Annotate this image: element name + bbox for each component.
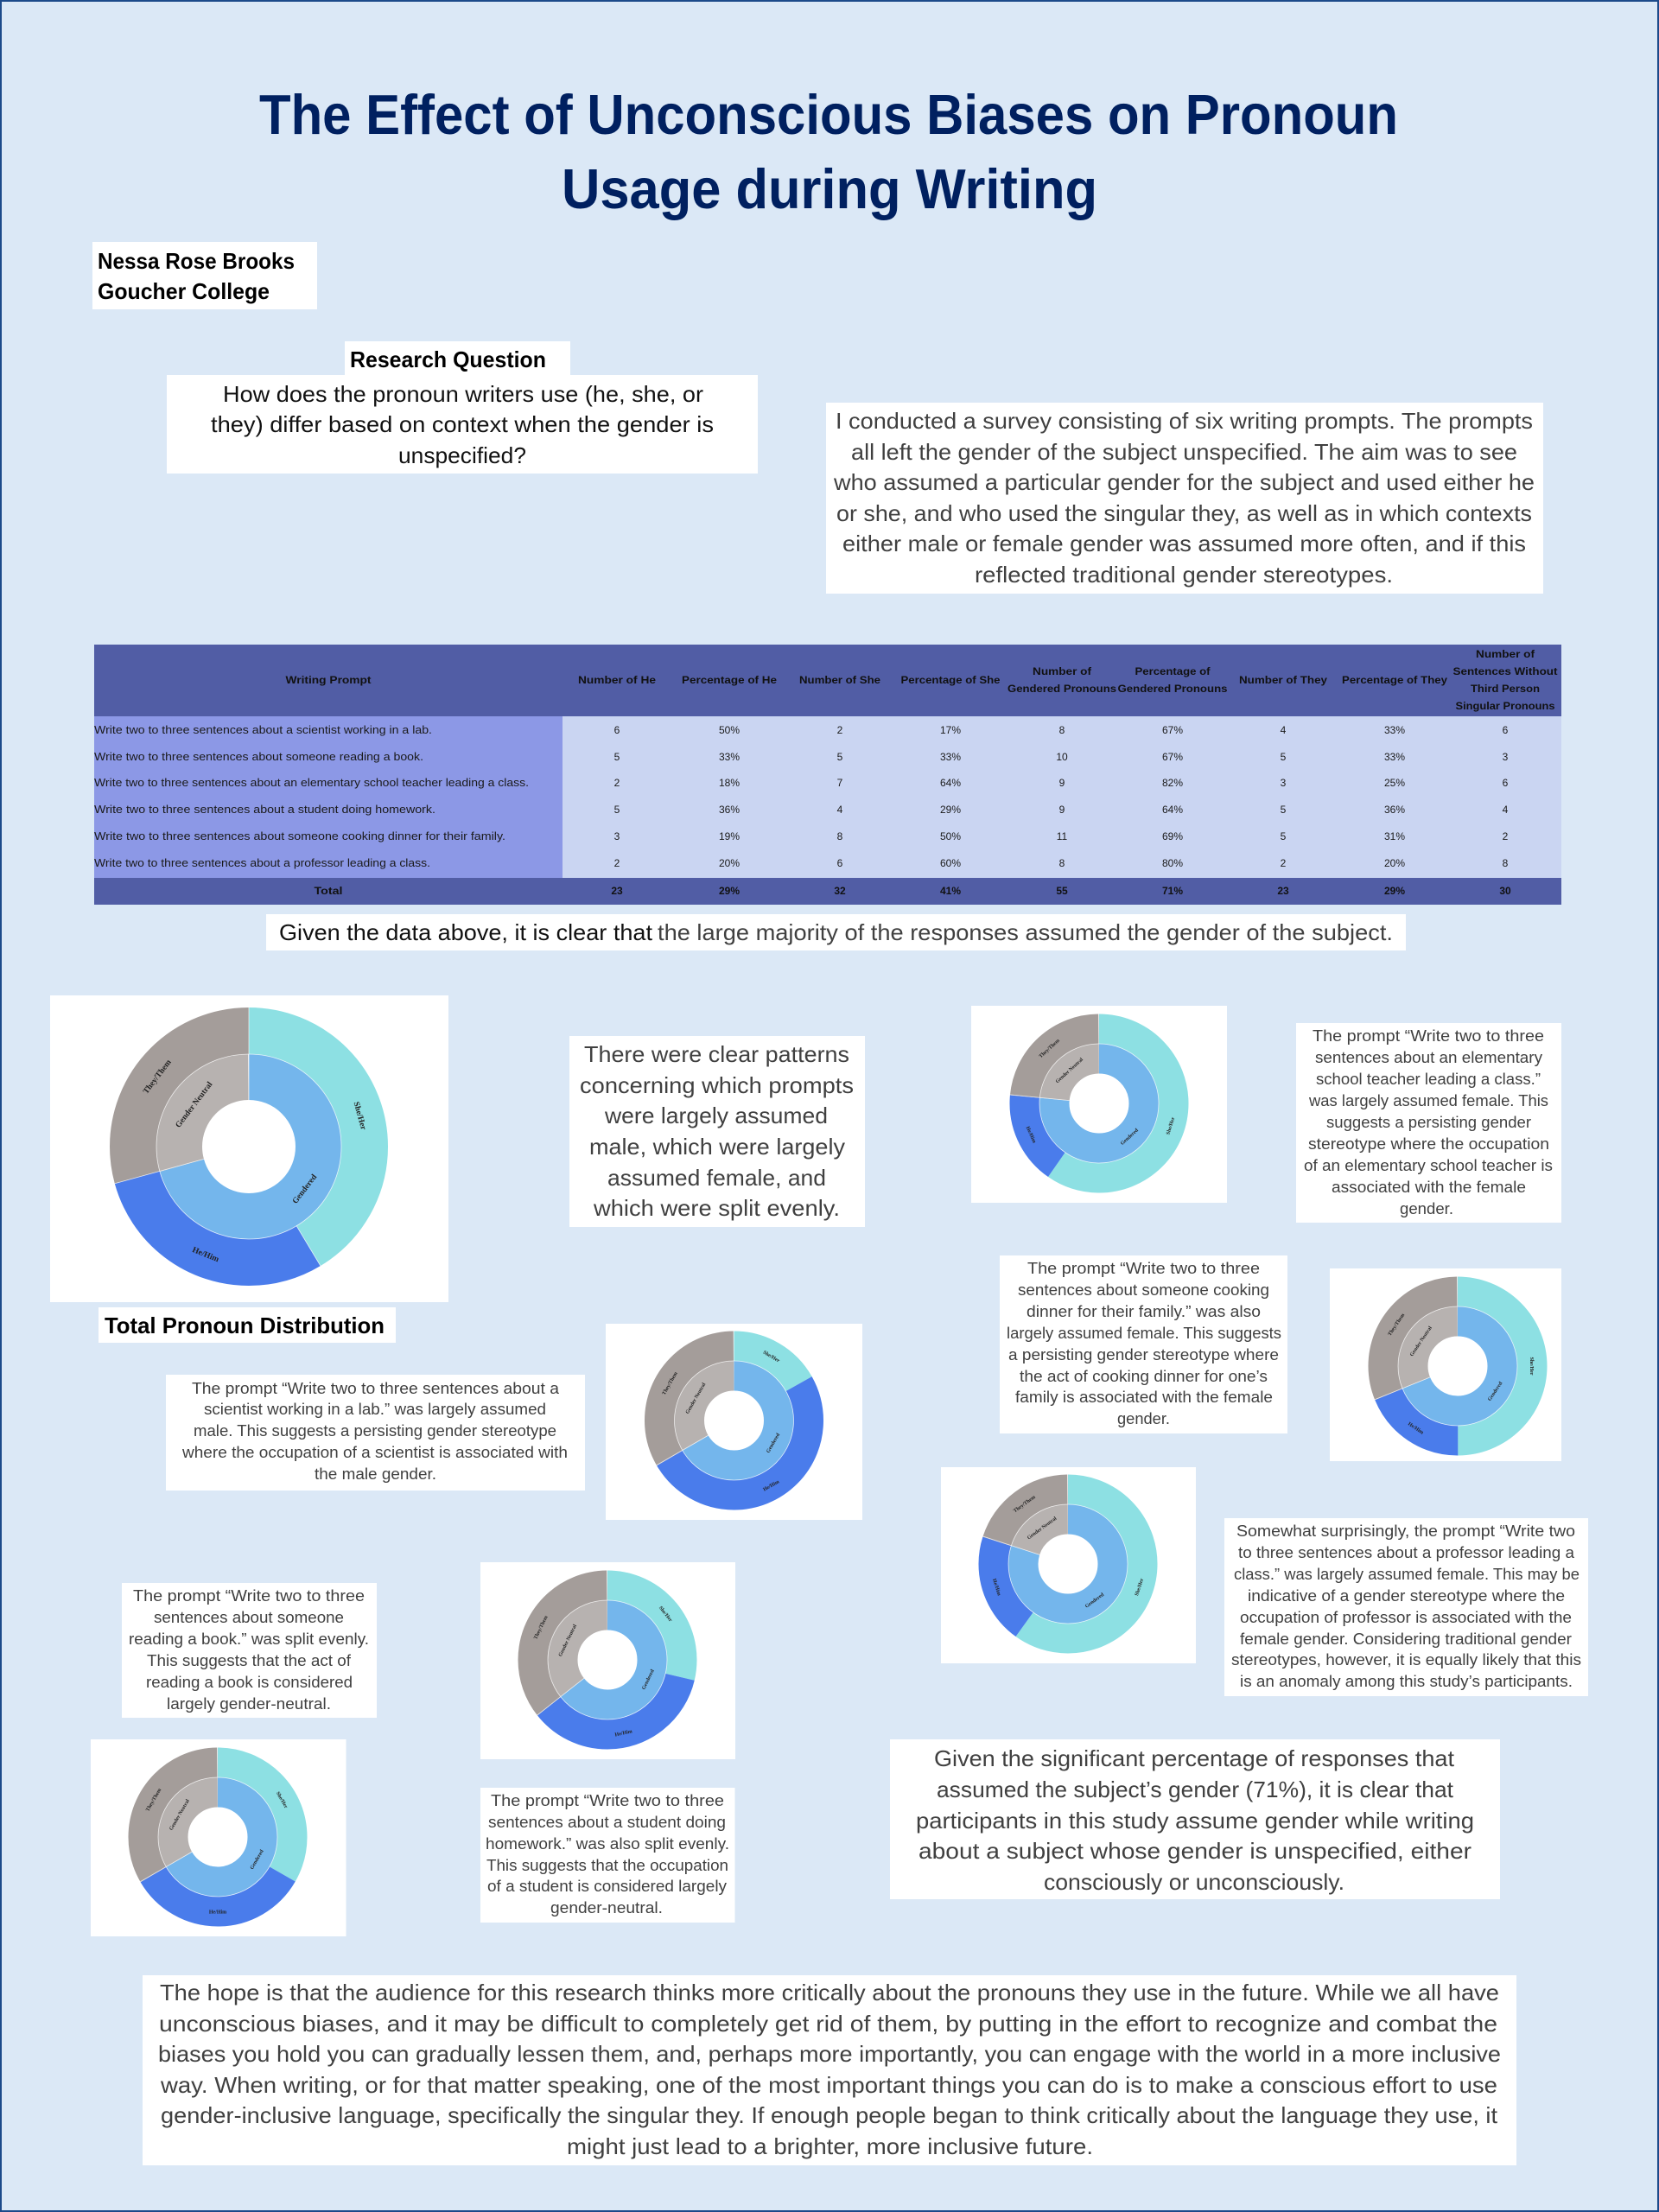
- table row: scientist: Write two to three sentences about a scientist working in a lab.: [94, 724, 432, 736]
- table row: professor: 2: [1281, 857, 1287, 869]
- text block: professor: indicative of a gender stereotype where the: [1248, 1587, 1565, 1605]
- text block: final hope statement: biases you hold you can gradually lessen them, and, perhaps more importantly, you can engage with the world in a more inclusive: [158, 2041, 1501, 2067]
- table header: Gendered Pronouns: [1007, 683, 1116, 695]
- text block: reading: The prompt “Write two to three: [133, 1587, 365, 1605]
- chart: professor: They/Them: [1013, 1495, 1037, 1514]
- text block: final hope statement: gender-inclusive language, specifically the singular they. If enough people began to think critically about the language they use, it: [161, 2102, 1498, 2128]
- chart: reading a book: Gender Neutral: [558, 1624, 578, 1657]
- chart: elementary school teacher: Gender Neutral: [1055, 1057, 1084, 1084]
- chart: cooking dinner: He/Him: [1407, 1421, 1424, 1436]
- table header: Percentage of: [1135, 665, 1211, 677]
- text block: patterns: concerning which prompts: [580, 1072, 854, 1098]
- table row: scientist: 6: [1503, 724, 1509, 736]
- table header: Writing Prompt: [285, 674, 372, 686]
- table row: student: 9: [1059, 804, 1065, 816]
- author block: Goucher College: [98, 278, 270, 304]
- text block: student homework: of a student is considered largely: [487, 1878, 727, 1895]
- table row: scientist: 4: [1281, 724, 1287, 736]
- text block: patterns: which were split evenly.: [593, 1195, 840, 1221]
- text block: results conclusion: about a subject whose gender is unspecified, either: [918, 1838, 1471, 1864]
- chart: professor: She/Her: [1135, 1578, 1145, 1597]
- text block: elementary school teacher: gender.: [1400, 1200, 1453, 1217]
- text block: method: either male or female gender was assumed more often, and if this: [842, 531, 1526, 556]
- table row: reading: 3: [1503, 751, 1509, 763]
- table header: Gendered Pronouns: [1118, 683, 1228, 695]
- table row: professor: [94, 857, 1509, 869]
- text block: scientist: male. This suggests a persisting gender stereotype: [194, 1422, 556, 1440]
- table row: elementary teacher: 7: [837, 777, 843, 789]
- text block: reading: largely gender-neutral.: [167, 1695, 331, 1713]
- table row: student: 36%: [719, 804, 740, 816]
- chart: student homework: [91, 1739, 346, 1936]
- chart: total pronoun distribution: They/Them: [142, 1058, 174, 1096]
- question text: unspecified?: [398, 442, 526, 468]
- chart: cooking dinner: Gendered: [1487, 1381, 1504, 1402]
- chart: student homework: They/Them: [145, 1788, 162, 1813]
- chart: professor: Gender Neutral: [1027, 1516, 1058, 1541]
- table header: Singular Pronouns: [1455, 700, 1555, 712]
- text block: cooking: largely assumed female. This suggests: [1007, 1325, 1281, 1342]
- table row: scientist: 67%: [1162, 724, 1183, 736]
- text block: patterns: were largely assumed: [604, 1103, 828, 1128]
- text block: results conclusion: consciously or unconsciously.: [1044, 1869, 1344, 1895]
- question text: they) differ based on context when the gender is: [211, 411, 714, 437]
- table row: reading: [94, 751, 1509, 763]
- table row: professor: 60%: [940, 857, 961, 869]
- table row: elementary teacher: [94, 777, 1509, 789]
- table row: elementary teacher: 6: [1503, 777, 1509, 789]
- chart: reading a book: She/Her: [658, 1605, 673, 1624]
- table header: Percentage of They: [1342, 674, 1447, 686]
- text block: cooking: the act of cooking dinner for one’s: [1020, 1368, 1268, 1385]
- text block: results conclusion: Given the significant percentage of responses that: [934, 1745, 1455, 1771]
- text block: scientist: [166, 1375, 585, 1491]
- table row: professor: 6: [837, 857, 843, 869]
- table row: professor: 2: [614, 857, 620, 869]
- chart: reading a book: [480, 1562, 735, 1759]
- table header: Percentage of She: [900, 674, 1001, 686]
- table row: total: 29%: [1384, 885, 1405, 897]
- chart: scientist: Gender Neutral: [685, 1382, 707, 1415]
- text block: student homework: homework.” was also split evenly.: [486, 1835, 729, 1853]
- text block: professor: Somewhat surprisingly, the prompt “Write two: [1236, 1522, 1575, 1540]
- chart: elementary school teacher: Gendered: [1120, 1128, 1140, 1147]
- table row: cooking: 50%: [940, 830, 961, 842]
- text block: scientist: The prompt “Write two to three sentences about a: [192, 1380, 560, 1397]
- text block: final hope statement: might just lead to a brighter, more inclusive future.: [567, 2133, 1093, 2159]
- chart: scientist: They/Them: [662, 1371, 679, 1396]
- text block: elementary school teacher: sentences about an elementary: [1315, 1049, 1542, 1066]
- table row: scientist: 33%: [1384, 724, 1405, 736]
- chart: professor: [941, 1467, 1196, 1663]
- table row: cooking: 31%: [1384, 830, 1405, 842]
- table row: professor: 20%: [1384, 857, 1405, 869]
- text block: professor: is an anomaly among this study’s participants.: [1240, 1673, 1573, 1690]
- text block: professor: class.” was largely assumed female. This may be: [1234, 1566, 1580, 1583]
- table row: scientist: 6: [614, 724, 620, 736]
- table row: total: 41%: [940, 885, 961, 897]
- table row: total: Total: [315, 885, 342, 897]
- table row: student: 5: [1281, 804, 1287, 816]
- table row: elementary teacher: 2: [614, 777, 620, 789]
- table row: total: 29%: [719, 885, 740, 897]
- chart: scientist: Gendered: [766, 1432, 782, 1454]
- table header: Number of She: [799, 674, 880, 686]
- chart: scientist: [606, 1324, 862, 1520]
- table row: student: 64%: [1162, 804, 1183, 816]
- text block: method: who assumed a particular gender for the subject and used either he: [833, 469, 1535, 495]
- text block: scientist: where the occupation of a scientist is associated with: [181, 1444, 568, 1461]
- table row: student: [94, 804, 1509, 816]
- text block: elementary school teacher: The prompt “Write two to three: [1313, 1027, 1544, 1045]
- title: The Effect of Unconscious Biases on Pronoun: [259, 83, 1398, 146]
- text block: professor: stereotypes, however, it is equally likely that this: [1231, 1651, 1581, 1669]
- text block: patterns: assumed female, and: [607, 1165, 826, 1191]
- chart: elementary school teacher: He/Him: [1025, 1126, 1037, 1144]
- text block: cooking: The prompt “Write two to three: [1027, 1260, 1260, 1277]
- table row: cooking: Write two to three sentences about someone cooking dinner for their family.: [94, 830, 505, 842]
- table header: Number of: [1476, 648, 1535, 660]
- text block: final hope statement: [143, 1975, 1516, 2165]
- question text: [211, 381, 714, 468]
- table header: Percentage of He: [682, 674, 777, 686]
- table row: elementary teacher: Write two to three sentences about an elementary school teacher leading a class.: [94, 777, 529, 789]
- text block: elementary school teacher: stereotype where the occupation: [1308, 1135, 1549, 1153]
- chart: cooking dinner: Gender Neutral: [1409, 1325, 1433, 1357]
- chart: cooking dinner: She/Her: [1529, 1357, 1534, 1376]
- text block: reading: This suggests that the act of: [147, 1652, 352, 1669]
- chart: total pronoun distribution: He/Him: [191, 1246, 220, 1264]
- text block: patterns: There were clear patterns: [584, 1041, 849, 1067]
- table row: cooking: 8: [837, 830, 843, 842]
- text block: table conclusion: Given the data above, it is clear that: [279, 919, 653, 945]
- table row: reading: 5: [614, 751, 620, 763]
- table header: Number of They: [1239, 674, 1327, 686]
- text block: student homework: The prompt “Write two to three: [491, 1792, 724, 1809]
- chart: total pronoun distribution: [50, 995, 448, 1302]
- text block: results conclusion: assumed the subject’s gender (71%), it is clear that: [937, 1777, 1454, 1802]
- chart: cooking dinner: [1330, 1268, 1561, 1461]
- text block: professor: occupation of professor is associated with the: [1240, 1609, 1572, 1626]
- table row: scientist: 50%: [719, 724, 740, 736]
- text block: results conclusion: participants in this study assume gender while writing: [916, 1808, 1474, 1834]
- author block: [92, 242, 317, 309]
- table row: reading: 33%: [940, 751, 961, 763]
- text block: final hope statement: unconscious biases, and it may be difficult to completely get rid of them, by putting in the effort to recognize and combat the: [159, 2011, 1497, 2037]
- text block: elementary school teacher: of an elementary school teacher is: [1304, 1157, 1553, 1174]
- question text: How does the pronoun writers use (he, she, or: [223, 381, 703, 407]
- table row: professor: Write two to three sentences about a professor leading a class.: [94, 857, 430, 869]
- table row: reading: 5: [837, 751, 843, 763]
- chart: scientist: He/Him: [762, 1479, 780, 1493]
- table row: elementary teacher: 9: [1059, 777, 1065, 789]
- heading: research question: Research Question: [350, 346, 546, 372]
- text block: student homework: This suggests that the occupation: [486, 1857, 728, 1874]
- chart: scientist: She/Her: [762, 1351, 780, 1364]
- table row: scientist: 8: [1059, 724, 1065, 736]
- heading: total pronoun distribution: Total Pronoun Distribution: [105, 1313, 385, 1338]
- table row: total: 23: [611, 885, 623, 897]
- title: [259, 83, 1398, 220]
- chart: reading a book: They/Them: [533, 1615, 550, 1640]
- table row: professor: 8: [1503, 857, 1509, 869]
- table row: scientist: 2: [837, 724, 843, 736]
- table row: cooking: 69%: [1162, 830, 1183, 842]
- text block: cooking: sentences about someone cooking: [1018, 1281, 1269, 1299]
- table row: scientist: [94, 724, 1509, 736]
- text block: method: all left the gender of the subject unspecified. The aim was to see: [851, 439, 1517, 465]
- text block: cooking: dinner for their family.” was also: [1027, 1303, 1261, 1320]
- table row: cooking: [94, 830, 1509, 842]
- chart: elementary school teacher: [971, 1006, 1227, 1203]
- table header: Number of He: [578, 674, 656, 686]
- text block: reading: reading a book.” was split evenly.: [129, 1630, 369, 1648]
- table row: total: 71%: [1162, 885, 1183, 897]
- text block: professor: [1224, 1518, 1588, 1696]
- text block: cooking: gender.: [1117, 1410, 1170, 1427]
- table row: reading: 33%: [1384, 751, 1405, 763]
- table row: cooking: 5: [1281, 830, 1287, 842]
- text block: method: I conducted a survey consisting of six writing prompts. The prompts: [836, 408, 1533, 434]
- text block: student homework: gender-neutral.: [550, 1899, 663, 1916]
- text block: cooking: family is associated with the female: [1015, 1389, 1273, 1406]
- table row: student: 4: [1503, 804, 1509, 816]
- table row: reading: 10: [1056, 751, 1068, 763]
- chart: total pronoun distribution: Gendered: [291, 1173, 320, 1205]
- data table: [94, 645, 1561, 905]
- table row: reading: 67%: [1162, 751, 1183, 763]
- text block: method: or she, and who used the singular they, as well as in which contexts: [836, 500, 1532, 526]
- text block: professor: to three sentences about a professor leading a: [1238, 1544, 1575, 1561]
- chart: cooking dinner: They/Them: [1388, 1313, 1406, 1337]
- chart: student homework: Gendered: [250, 1848, 265, 1871]
- heading: total pronoun distribution: [99, 1307, 396, 1343]
- table row: student: 29%: [940, 804, 961, 816]
- text block: elementary school teacher: associated with the female: [1332, 1179, 1526, 1196]
- table row: cooking: 11: [1057, 830, 1068, 842]
- text block: scientist: scientist working in a lab.” was largely assumed: [204, 1401, 546, 1418]
- table row: total: [315, 885, 1511, 897]
- author block: Nessa Rose Brooks: [98, 248, 295, 274]
- text block: final hope statement: way. When writing, or for that matter speaking, one of the most important things you can do is to make a conscious effort to use: [160, 2072, 1497, 2098]
- table row: elementary teacher: 18%: [719, 777, 740, 789]
- text block: final hope statement: The hope is that the audience for this research thinks more critically about the pronouns they use in the future. While we all have: [160, 1980, 1499, 2005]
- table row: reading: 5: [1281, 751, 1287, 763]
- table row: elementary teacher: 3: [1281, 777, 1287, 789]
- chart: student homework: He/Him: [209, 1910, 226, 1915]
- table row: elementary teacher: 82%: [1162, 777, 1183, 789]
- table row: elementary teacher: 25%: [1384, 777, 1405, 789]
- table row: reading: 33%: [719, 751, 740, 763]
- table row: student: 4: [837, 804, 843, 816]
- table row: student: 5: [614, 804, 620, 816]
- table row: scientist: 17%: [940, 724, 961, 736]
- chart: professor: He/Him: [991, 1578, 1001, 1597]
- text block: results conclusion: [890, 1739, 1500, 1899]
- text block: table conclusion: the large majority of the responses assumed the gender of the subject.: [658, 919, 1393, 945]
- text block: method: [826, 403, 1543, 594]
- text block: reading: [122, 1583, 377, 1718]
- table row: reading: Write two to three sentences about someone reading a book.: [94, 751, 423, 763]
- chart: elementary school teacher: They/Them: [1039, 1039, 1061, 1059]
- table row: elementary teacher: 64%: [940, 777, 961, 789]
- table row: cooking: 3: [614, 830, 620, 842]
- chart: student homework: Gender Neutral: [168, 1798, 191, 1832]
- text block: reading: sentences about someone: [154, 1609, 344, 1626]
- table row: professor: 80%: [1162, 857, 1183, 869]
- chart: elementary school teacher: She/Her: [1166, 1116, 1176, 1135]
- chart: reading a book: Gendered: [641, 1669, 656, 1691]
- text block: student homework: sentences about a student doing: [488, 1814, 726, 1831]
- table row: student: 36%: [1384, 804, 1405, 816]
- text block: student homework: [480, 1788, 734, 1923]
- text block: professor: female gender. Considering traditional gender: [1240, 1630, 1572, 1648]
- table header: Number of: [1033, 665, 1092, 677]
- chart: student homework: She/Her: [275, 1791, 289, 1809]
- text block: cooking: [1000, 1255, 1287, 1433]
- text block: reading: reading a book is considered: [146, 1674, 353, 1691]
- text block: table conclusion: [266, 914, 1406, 950]
- table header: Sentences Without: [1453, 665, 1557, 677]
- table row: student: Write two to three sentences about a student doing homework.: [94, 804, 435, 816]
- title: Usage during Writing: [562, 157, 1097, 220]
- text block: elementary school teacher: suggests a persisting gender: [1326, 1114, 1531, 1131]
- table row: total: 55: [1056, 885, 1068, 897]
- table row: total: 32: [834, 885, 846, 897]
- table header: [285, 648, 1557, 712]
- table row: professor: 20%: [719, 857, 740, 869]
- text block: elementary school teacher: [1296, 1023, 1561, 1223]
- chart: professor: Gendered: [1084, 1592, 1106, 1610]
- table header: Third Person: [1471, 683, 1540, 695]
- text block: elementary school teacher: school teacher leading a class.”: [1316, 1071, 1541, 1088]
- table row: total: 23: [1277, 885, 1289, 897]
- text block: patterns: male, which were largely: [589, 1134, 845, 1160]
- chart: reading a book: He/Him: [614, 1729, 632, 1738]
- table row: professor: 8: [1059, 857, 1065, 869]
- text block: patterns: [569, 1036, 865, 1227]
- text block: scientist: the male gender.: [315, 1465, 436, 1483]
- table row: cooking: 2: [1503, 830, 1509, 842]
- text block: method: reflected traditional gender stereotypes.: [975, 562, 1393, 588]
- panel: research question: [167, 341, 758, 474]
- text block: elementary school teacher: was largely assumed female. This: [1308, 1092, 1548, 1109]
- chart: total pronoun distribution: Gender Neutral: [175, 1080, 215, 1129]
- text block: cooking: a persisting gender stereotype where: [1008, 1346, 1279, 1363]
- table row: cooking: 19%: [719, 830, 740, 842]
- chart: total pronoun distribution: She/Her: [352, 1101, 367, 1132]
- table row: total: 30: [1499, 885, 1511, 897]
